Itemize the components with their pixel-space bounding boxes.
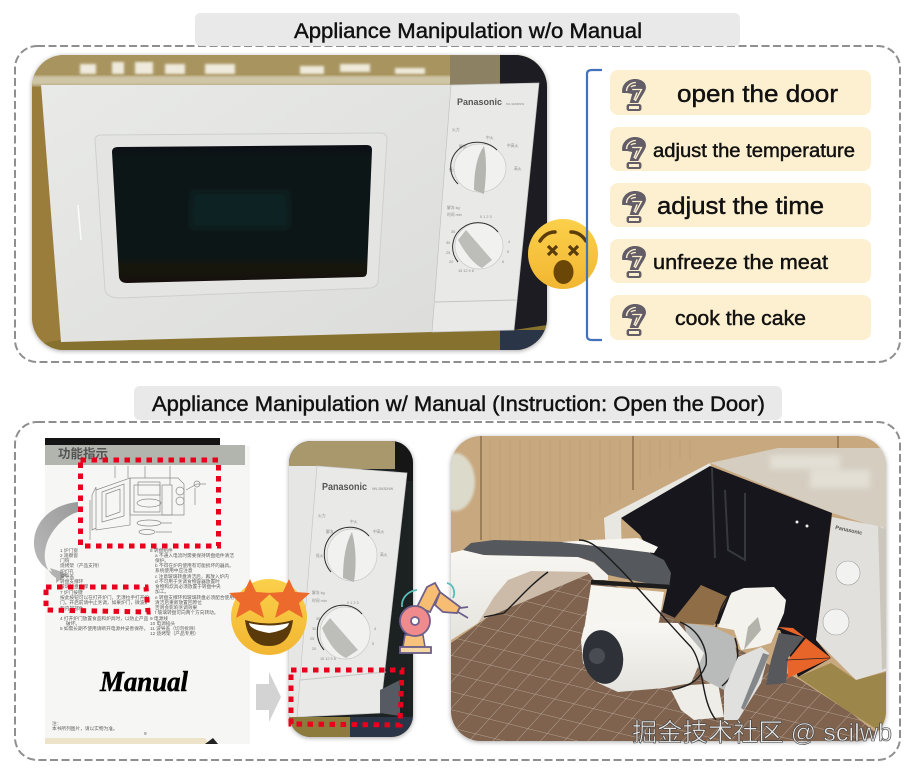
robot wrist: [684, 623, 738, 690]
manual text right column: b 不得在炉内使用有可能损坏的器具。: [155, 562, 234, 569]
photo: control panel closeup: 解冻 kg: [312, 590, 325, 595]
photo: control panel closeup: 0 1 2 3: [347, 601, 359, 605]
manual text right column: a 不通入电流时需要保持转盘组件清洁: [155, 552, 234, 559]
photo: microwave front view: 25: [446, 251, 450, 255]
manual text left column: 烧烤架（产品支持）: [60, 562, 102, 569]
manual text right column: f 玻璃转盘可向两个方向转动。: [155, 609, 219, 616]
photo: microwave front view: 15 12 9 8: [458, 269, 474, 273]
knob: time: [453, 223, 503, 269]
photo: microwave front view: [30, 55, 547, 350]
manual text right column: 10 电源插头: [150, 620, 176, 627]
photo: microwave front view: 4: [508, 240, 510, 244]
area behind arm arch: [451, 560, 600, 640]
robot dark cover: [463, 540, 671, 588]
option: adjust the time: adjust the time: [657, 193, 824, 220]
manual text left column: 门钩: [60, 557, 70, 564]
manual text left column: 7 炉门按键: [60, 589, 83, 596]
panel: appliance manipulation with manual: [15, 422, 900, 760]
photo: microwave front view: 0 1 2 3: [480, 215, 492, 219]
highlight: door button text: [46, 587, 148, 612]
manual text left column: 4 打开炉门放置食品和炉具时，以防止产品: [60, 615, 149, 622]
emoji: dizzy shocked face: [528, 219, 598, 289]
manual text right column: 9: [144, 731, 147, 736]
manual text right column: e 转盘支撑环和玻璃转盘必须配合使用: [155, 594, 234, 601]
photo: microwave front view: 30: [446, 241, 450, 245]
photo: control panel closeup: 4: [374, 627, 376, 631]
panel: appliance manipulation without manual: [15, 46, 900, 362]
manual text left column: 波导盖: [60, 573, 74, 580]
manual text right column: 注：: [52, 720, 61, 727]
heading: without manual: Appliance Manipulation w/o Manual: [294, 20, 642, 43]
manual text right column: 9 电源线: [150, 615, 168, 622]
heading: with manual: [134, 386, 782, 420]
photo: microwave front view: 低火: [449, 167, 457, 172]
knob: power closeup: [324, 527, 377, 582]
option: unfreeze the meat: [610, 239, 871, 283]
window frame: [95, 133, 387, 298]
photo: control panel closeup: 30: [312, 627, 316, 631]
photo: control panel closeup: 火力: [318, 513, 326, 518]
cavity: [621, 466, 832, 677]
photo: control panel closeup: 解冻: [326, 529, 334, 534]
highlight: door release button: [291, 670, 402, 725]
manual text left column: 和内部部件。: [60, 605, 88, 612]
brand: Panasonic: [457, 97, 502, 108]
manual text right column: 8 转盘组件: [150, 547, 173, 554]
photo: control panel closeup: 25: [310, 637, 314, 641]
watermark: 掘金技术社区 @ scilwb: [632, 719, 892, 747]
photo: microwave front view: 高火: [514, 166, 522, 171]
manual text right column: 清洁后重新放置回原位: [155, 599, 202, 606]
photo: microwave front view: NN-SM30NW: [506, 102, 524, 106]
manual text left column: 按此按钮可以在打开炉门，无须拉手打开炉: [60, 594, 149, 601]
arrow to photo: [256, 672, 281, 722]
gripper bracket: [766, 633, 804, 685]
microwave control panel: [432, 83, 539, 332]
photo: control panel closeup: NN-SM30NW: [372, 487, 394, 491]
option: adjust the temperature: adjust the temperature: [653, 141, 855, 162]
option: adjust the temperature: [610, 127, 871, 171]
manual heading: 功能指示: [58, 446, 108, 461]
manual text right column: c 注意玻璃转盘清洁后，再放入炉内: [155, 573, 229, 580]
manual text left column: 破坏。: [66, 620, 80, 627]
icon: robot arm: [400, 583, 468, 653]
knob: time closeup: [317, 605, 370, 659]
microwave door: [41, 85, 451, 342]
manual text right column: 12 烧烤架（产品专用）: [150, 630, 199, 637]
open door edge: [604, 463, 712, 549]
photo: control panel closeup: 高火: [380, 552, 388, 557]
manual text left column: 1 炉门窗: [60, 547, 78, 554]
manual diagram: [90, 466, 206, 540]
photo: control panel closeup: 5: [372, 642, 374, 646]
manual text left column: 门。开启前请中止烹调，如果炉门，微波炉: [60, 599, 149, 606]
robot upper link: [451, 550, 608, 640]
manual text right column: 加工。: [155, 588, 169, 595]
knob: power: [451, 142, 506, 194]
photo: robot opening microwave: Panasonic: [835, 525, 863, 537]
photo: microwave front view: 解冻 kg: [447, 205, 460, 210]
robot white dome: [561, 538, 658, 553]
microwave top: [710, 448, 886, 530]
manual text right column: d 不可用于烹调食物容器放置时: [155, 578, 220, 585]
manual text left column: 2 观察窗: [60, 552, 78, 559]
microwave panel: [816, 517, 889, 680]
photo: microwave front view: 35: [451, 230, 455, 234]
manual label: Manual: [99, 667, 188, 698]
heading: with manual: Appliance Manipulation w/ Manual (Instruction: Open the Door): [152, 393, 765, 416]
manual text right column: 本书所列图片，请以实物为准。: [52, 725, 118, 732]
photo: microwave front view: 5: [507, 250, 509, 254]
photo: robot opening microwave: [435, 436, 889, 741]
brand closeup: Panasonic: [322, 482, 367, 493]
option: open the door: open the door: [677, 81, 838, 108]
photo: microwave front view: 6: [502, 260, 504, 264]
manual page: [34, 438, 250, 744]
highlight: oven diagram: [80, 460, 218, 546]
manual text left column: 炉灯孔: [60, 568, 74, 575]
gripper orange fingers: [778, 627, 831, 678]
robot shoulder joint: [584, 585, 664, 630]
photo: control panel closeup: 中火: [350, 519, 358, 524]
option: unfreeze the meat: unfreeze the meat: [653, 252, 828, 274]
manual text left column: 5 如需长期不使用请断开电源并妥善保存。: [60, 625, 148, 632]
photo: control panel closeup: 20: [312, 647, 316, 651]
manual text right column: 系统使用中应注意: [155, 567, 193, 574]
robot lower base: [671, 683, 724, 720]
manual text right column: 食物和炊具必须放置于转盘中央: [155, 583, 221, 590]
photo: microwave front view: 20: [449, 260, 453, 264]
photo: control panel closeup: 时间 min: [312, 598, 327, 603]
manual text right column: 11 波导盖（切勿拆除）: [150, 625, 198, 632]
manual text right column: 否则会影响烹调效果: [155, 604, 198, 611]
manual text right column: 保护。: [155, 557, 169, 564]
photo: control panel closeup: 15 12 9 8: [320, 657, 336, 661]
wooden shelf: [798, 663, 886, 735]
option: open the door: [610, 70, 871, 115]
gripper body: [718, 587, 786, 650]
manual text left column: 转盘支撑环: [60, 578, 84, 585]
option: cook the cake: [610, 295, 871, 340]
photo: microwave front view: 中火: [486, 135, 494, 140]
gripper plate: [724, 647, 769, 720]
manual text left column: 玻璃转盘支撑: [60, 583, 88, 590]
option: cook the cake: cook the cake: [675, 308, 806, 330]
emoji: star struck face: [229, 579, 310, 655]
manual text left column: [60, 547, 149, 632]
photo: control panel closeup: 35: [316, 617, 320, 621]
photo: microwave front view: 火力: [452, 127, 460, 132]
window glass: [112, 145, 372, 283]
bracket: [587, 70, 602, 340]
cables: [484, 540, 738, 720]
curved arrow: [34, 502, 78, 583]
option: adjust the time: [610, 183, 871, 227]
photo: control panel closeup: 低火: [316, 553, 324, 558]
manual text right column: [52, 547, 234, 736]
photo: microwave front view: 时间 min: [447, 212, 462, 217]
heading: without manual: [195, 13, 740, 46]
tabletop mat: [451, 573, 886, 741]
robot elbow: [581, 622, 704, 692]
photo: control panel closeup: 中高火: [373, 529, 385, 534]
photo: microwave front view: 解冻: [459, 144, 467, 149]
photo: control panel closeup: [289, 441, 413, 737]
photo: microwave front view: 中高火: [507, 143, 519, 148]
